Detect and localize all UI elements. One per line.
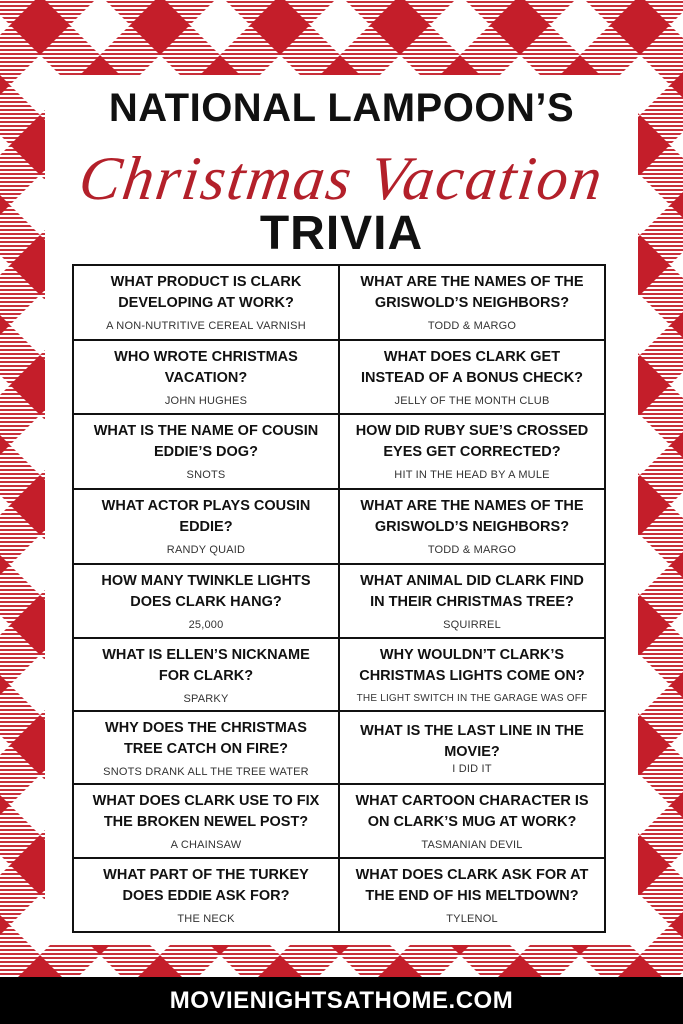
row 3: SNOTS bbox=[187, 469, 225, 481]
trivia table bbox=[72, 264, 606, 933]
row 7 bbox=[74, 712, 604, 785]
footer bar with website bbox=[0, 977, 683, 1024]
row 2: VACATION? bbox=[165, 370, 247, 386]
row 7: TREE CATCH ON FIRE? bbox=[124, 741, 288, 757]
row 9: THE NECK bbox=[177, 913, 235, 925]
row 7: I DID IT bbox=[452, 763, 492, 775]
row 9 bbox=[103, 859, 588, 931]
title: Trivia: TRIVIA bbox=[260, 207, 423, 260]
row 5: IN THEIR CHRISTMAS TREE? bbox=[370, 594, 574, 610]
row 7: SNOTS DRANK ALL THE TREE WATER bbox=[103, 766, 309, 778]
row 4: RANDY QUAID bbox=[167, 544, 245, 556]
row 1: DEVELOPING AT WORK? bbox=[118, 295, 294, 311]
row 9: THE END OF HIS MELTDOWN? bbox=[365, 888, 579, 904]
row 2: WHAT DOES CLARK GET bbox=[384, 349, 560, 365]
row 2: JOHN HUGHES bbox=[165, 395, 247, 407]
row 2 bbox=[74, 341, 604, 415]
white panel bbox=[45, 75, 638, 945]
row 3: WHAT IS THE NAME OF COUSIN bbox=[94, 423, 318, 439]
row 9: WHAT PART OF THE TURKEY bbox=[103, 867, 309, 883]
row 1: TODD & MARGO bbox=[428, 320, 516, 332]
row 3: HIT IN THE HEAD BY A MULE bbox=[394, 469, 550, 481]
row 8: TASMANIAN DEVIL bbox=[421, 839, 523, 851]
row 4 bbox=[74, 490, 604, 565]
row 6: THE LIGHT SWITCH IN THE GARAGE WAS OFF bbox=[357, 693, 587, 704]
row 3 bbox=[74, 415, 604, 490]
row 8: A CHAINSAW bbox=[171, 839, 241, 851]
row 6: WHAT IS ELLEN’S NICKNAME bbox=[102, 647, 310, 663]
row 4: GRISWOLD’S NEIGHBORS? bbox=[375, 519, 569, 535]
row 4: TODD & MARGO bbox=[428, 544, 516, 556]
row 6: FOR CLARK? bbox=[159, 668, 253, 684]
row 5: WHAT ANIMAL DID CLARK FIND bbox=[360, 573, 584, 589]
row 2: INSTEAD OF A BONUS CHECK? bbox=[361, 370, 583, 386]
row 1 bbox=[74, 266, 604, 341]
row 7: WHAT IS THE LAST LINE IN THE bbox=[360, 723, 584, 739]
row 6: SPARKY bbox=[183, 693, 228, 705]
title: Christmas Vacation script: Christmas Vacation bbox=[75, 145, 608, 213]
row 8: WHAT CARTOON CHARACTER IS bbox=[355, 793, 589, 809]
row 5 bbox=[74, 565, 604, 639]
row 8: ON CLARK’S MUG AT WORK? bbox=[368, 814, 576, 830]
row 1: GRISWOLD’S NEIGHBORS? bbox=[375, 295, 569, 311]
row 1: WHAT ARE THE NAMES OF THE bbox=[360, 274, 584, 290]
row 5: DOES CLARK HANG? bbox=[130, 594, 282, 610]
row 9: WHAT DOES CLARK ASK FOR AT bbox=[356, 867, 588, 883]
footer bar with website: MOVIENIGHTSATHOME.COM bbox=[170, 987, 513, 1014]
title: National Lampoon's: NATIONAL LAMPOON’S bbox=[109, 86, 574, 130]
row 9: DOES EDDIE ASK FOR? bbox=[122, 888, 290, 904]
row 5: 25,000 bbox=[189, 619, 223, 631]
row 4: WHAT ARE THE NAMES OF THE bbox=[360, 498, 584, 514]
row 2: WHO WROTE CHRISTMAS bbox=[114, 349, 298, 365]
row 1: WHAT PRODUCT IS CLARK bbox=[111, 274, 301, 290]
row 3: EDDIE’S DOG? bbox=[154, 444, 258, 460]
row 7: MOVIE? bbox=[444, 744, 500, 760]
row 4: WHAT ACTOR PLAYS COUSIN bbox=[102, 498, 310, 514]
row 8 bbox=[74, 785, 604, 859]
row 5: SQUIRREL bbox=[443, 619, 501, 631]
row 2: JELLY OF THE MONTH CLUB bbox=[395, 395, 549, 407]
row 6: CHRISTMAS LIGHTS COME ON? bbox=[359, 668, 585, 684]
row 9: TYLENOL bbox=[446, 913, 498, 925]
row 8: THE BROKEN NEWEL POST? bbox=[104, 814, 308, 830]
row 4: EDDIE? bbox=[179, 519, 233, 535]
row 6 bbox=[74, 639, 604, 712]
row 6: WHY WOULDN’T CLARK’S bbox=[380, 647, 564, 663]
row 7: WHY DOES THE CHRISTMAS bbox=[105, 720, 307, 736]
row 1: A NON-NUTRITIVE CEREAL VARNISH bbox=[106, 320, 306, 332]
row 5: HOW MANY TWINKLE LIGHTS bbox=[101, 573, 311, 589]
row 3: HOW DID RUBY SUE’S CROSSED bbox=[356, 423, 588, 439]
row 8: WHAT DOES CLARK USE TO FIX bbox=[93, 793, 319, 809]
row 3: EYES GET CORRECTED? bbox=[383, 444, 561, 460]
